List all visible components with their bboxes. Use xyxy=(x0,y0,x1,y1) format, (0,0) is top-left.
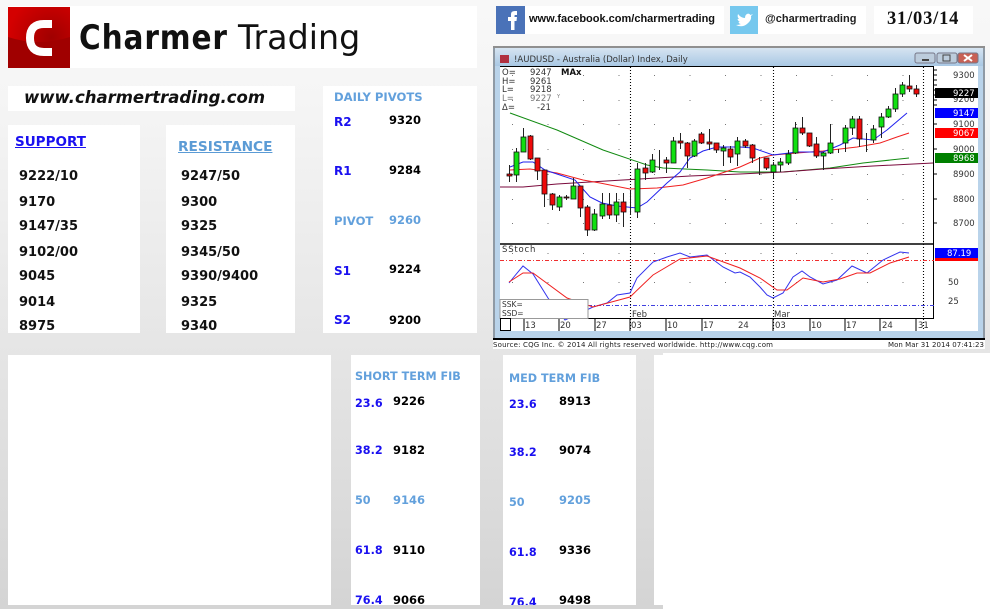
pivot rows: 9200 xyxy=(389,313,421,327)
icon: twitter xyxy=(730,6,758,34)
panel: facebook link xyxy=(496,6,724,34)
pivot rows: R2 xyxy=(334,115,352,129)
chart source line: Source: CQG Inc. © 2014 All rights reserved worldwide. http://www.cqg.com xyxy=(493,341,773,349)
price panel frames xyxy=(500,66,937,318)
website url: www.charmertrading.com xyxy=(24,88,265,107)
twitter handle: @charmertrading xyxy=(765,13,856,25)
med fib rows: 9336 xyxy=(559,543,591,557)
support levels: 9014 xyxy=(19,295,55,310)
short fib rows: 9182 xyxy=(393,443,425,457)
short fib rows: 9226 xyxy=(393,394,425,408)
pivot rows: S2 xyxy=(334,313,351,327)
date axis: 10 xyxy=(811,321,822,331)
price axis labels: 8800 xyxy=(953,195,975,205)
date axis: 24 xyxy=(882,321,893,331)
last price tags: 9227 xyxy=(953,89,975,99)
date axis: 31 xyxy=(918,321,929,331)
support levels: 9170 xyxy=(19,195,55,210)
OHLC readout: MAx xyxy=(561,68,582,78)
price axis labels: 9100 xyxy=(953,120,975,130)
candlesticks: green bodies xyxy=(514,85,905,230)
pivot rows: 9224 xyxy=(389,262,421,276)
window title: !AUDUSD - Australia (Dollar) Index, Daily xyxy=(514,55,688,65)
med fib rows: 38.2 xyxy=(509,446,537,459)
med fib rows: 9205 xyxy=(559,493,591,507)
company name: Trading xyxy=(238,18,360,58)
price axis labels: 25 xyxy=(948,297,959,307)
facebook url: www.facebook.com/charmertrading xyxy=(529,13,715,25)
resistance levels: 9325 xyxy=(181,295,217,310)
date axis: 17 xyxy=(703,321,714,331)
panel: blank right xyxy=(654,355,990,605)
OHLC readout: L= xyxy=(502,85,514,95)
date axis: Feb xyxy=(632,310,647,320)
OHLC readout: -21 xyxy=(537,103,551,113)
resistance levels: 9345/50 xyxy=(181,245,240,260)
last price tags: 9147 xyxy=(953,109,975,119)
panel: website xyxy=(8,86,295,111)
OHLC readout: 9218 xyxy=(530,85,552,95)
company name: Charmer xyxy=(79,18,228,58)
short fib rows: 9146 xyxy=(393,493,425,507)
OHLC readout: H= xyxy=(502,77,516,87)
panel: twitter link xyxy=(730,6,866,34)
med fib rows: 61.8 xyxy=(509,546,537,559)
resistance heading: RESISTANCE xyxy=(178,139,272,155)
panel: resistance xyxy=(166,125,295,333)
med fib rows: 9074 xyxy=(559,443,591,457)
support levels: 9222/10 xyxy=(19,169,78,184)
panel: med term fib xyxy=(503,355,636,605)
short fib rows: 61.8 xyxy=(355,544,383,557)
window buttons xyxy=(915,53,978,63)
price axis labels: 9300 xyxy=(953,71,975,81)
date text: 31/03/14 xyxy=(887,9,959,29)
last price tags: 87.19 xyxy=(947,249,971,259)
med fib rows: 8913 xyxy=(559,394,591,408)
pivot rows: S1 xyxy=(334,264,351,278)
candlestick chart window xyxy=(493,46,985,349)
resistance levels: 9390/9400 xyxy=(181,269,258,284)
price axis labels: 50 xyxy=(948,278,959,288)
panel: logo header xyxy=(8,6,477,68)
short fib rows xyxy=(355,394,425,605)
date axis xyxy=(500,310,929,331)
date axis: Mar xyxy=(774,310,791,320)
OHLC readout: 9227 xyxy=(530,94,552,104)
pivot rows: 9320 xyxy=(389,113,421,127)
resistance levels: 9247/50 xyxy=(181,169,240,184)
support heading: SUPPORT xyxy=(15,134,86,150)
support levels: 9045 xyxy=(19,269,55,284)
stochastic legend box xyxy=(500,300,588,318)
panel: blank right extension xyxy=(663,353,990,609)
OHLC readout: Y xyxy=(556,94,561,100)
date axis: 03 xyxy=(631,321,642,331)
short fib rows: 23.6 xyxy=(355,397,383,410)
pivot rows: 9284 xyxy=(389,163,421,177)
panel: blank left xyxy=(8,355,331,605)
price axis labels xyxy=(948,71,975,307)
chart source line xyxy=(493,340,985,349)
stochastic legend box: SSD= xyxy=(502,309,524,318)
resistance levels xyxy=(181,169,258,333)
short fib rows: 9110 xyxy=(393,543,425,557)
med fib rows xyxy=(509,394,591,605)
date axis: 17 xyxy=(846,321,857,331)
panel: date xyxy=(874,6,973,34)
panel: daily pivots xyxy=(323,86,477,333)
date axis: 10 xyxy=(667,321,678,331)
support levels xyxy=(19,169,78,333)
resistance levels: 9325 xyxy=(181,219,217,234)
pivots heading: DAILY PIVOTS xyxy=(334,90,423,104)
last price tags xyxy=(935,88,978,261)
OHLC readout: L= xyxy=(502,94,514,104)
price axis labels: 8700 xyxy=(953,219,975,229)
price axis labels: 9200 xyxy=(953,95,975,105)
OHLC readout: Δ= xyxy=(502,103,515,113)
date axis: 27 xyxy=(596,321,607,331)
candlesticks: wicks xyxy=(510,75,916,236)
pivot rows: PIVOT xyxy=(334,214,373,228)
date axis: 13 xyxy=(525,321,536,331)
moving averages xyxy=(500,113,933,208)
date axis: 20 xyxy=(560,321,571,331)
support levels: 9102/00 xyxy=(19,245,78,260)
date axis: 24 xyxy=(738,321,749,331)
price axis labels: 8900 xyxy=(953,170,975,180)
stochastic panel xyxy=(500,245,934,320)
stochastic panel: SStoch xyxy=(502,245,536,255)
last price tags: 8968 xyxy=(953,154,975,164)
last price tags: 9067 xyxy=(953,129,975,139)
OHLC readout: O= xyxy=(502,68,516,78)
resistance levels: 9300 xyxy=(181,195,217,210)
panel: short term fib xyxy=(351,355,480,605)
chart source line: Mon Mar 31 2014 07:41:23 xyxy=(888,341,984,349)
OHLC readout: 9247 xyxy=(530,68,552,78)
grid xyxy=(512,76,933,282)
med fib heading: MED TERM FIB xyxy=(509,372,600,385)
med fib rows: 23.6 xyxy=(509,398,537,411)
company name xyxy=(79,18,360,58)
icon: Charmer C logo xyxy=(8,7,70,68)
pivot rows: R1 xyxy=(334,164,352,178)
candlesticks: red bodies xyxy=(507,86,919,230)
short fib rows: 50 xyxy=(355,494,371,507)
pivot rows: 9260 xyxy=(389,213,421,227)
support levels: 9147/35 xyxy=(19,219,78,234)
date axis: 03 xyxy=(775,321,786,331)
OHLC readout xyxy=(502,68,582,113)
short fib heading: SHORT TERM FIB xyxy=(355,370,461,383)
med fib rows: 50 xyxy=(509,496,525,509)
OHLC readout: 9261 xyxy=(530,77,552,87)
pivot rows xyxy=(334,113,421,327)
icon: window app xyxy=(500,55,509,63)
panel: support xyxy=(8,125,140,333)
icon: facebook xyxy=(496,6,525,34)
stochastic legend box: SSK= xyxy=(502,300,523,309)
short fib rows: 38.2 xyxy=(355,444,383,457)
price axis labels: 9000 xyxy=(953,145,975,155)
